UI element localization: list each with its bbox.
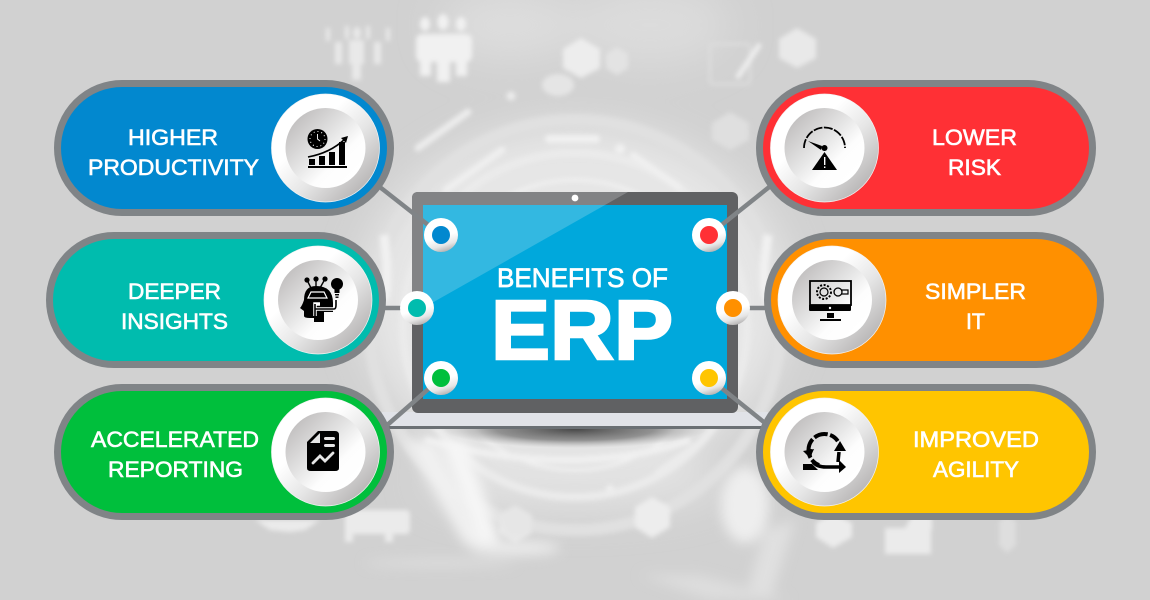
panel: improved agility: [760, 388, 1092, 516]
label: INSIGHTS: [121, 309, 228, 334]
connector lines: [376, 180, 778, 427]
node: red: [692, 218, 726, 252]
webcam: [572, 195, 578, 201]
icon disc: [272, 94, 380, 202]
label: IMPROVED: [913, 427, 1039, 452]
icon: head with circuit and light bulb: [300, 276, 343, 322]
label: PRODUCTIVITY: [88, 155, 259, 180]
node: orange: [716, 291, 750, 325]
label: DEEPER: [128, 279, 221, 304]
panel: higher productivity: [58, 84, 390, 212]
checklist and pencil: [710, 44, 750, 84]
title line two: ERP: [491, 283, 673, 377]
hexagons: [563, 38, 600, 78]
label: IT: [966, 309, 985, 334]
label: [121, 279, 228, 334]
people group left: [326, 26, 390, 80]
node: yellow: [692, 361, 726, 395]
people group right: [416, 14, 472, 82]
bezel highlight: [412, 192, 628, 314]
label: REPORTING: [108, 457, 243, 482]
laptop: [382, 192, 768, 448]
icon disc: [778, 246, 886, 354]
icon disc: [272, 398, 380, 506]
label: HIGHER: [128, 125, 218, 150]
panel: deeper insights: [50, 236, 382, 364]
label: [932, 125, 1017, 180]
laptop shadow: [443, 410, 707, 448]
node: teal: [400, 291, 434, 325]
label: [88, 125, 259, 180]
node: green: [424, 361, 458, 395]
icon disc: [770, 398, 878, 506]
icon disc: [770, 94, 878, 202]
bottom hexagons and shapes: [635, 497, 670, 538]
label: SIMPLER: [925, 279, 1026, 304]
label: AGILITY: [933, 457, 1019, 482]
decorative rings: [370, 112, 780, 530]
label: LOWER: [932, 125, 1017, 150]
icon: agility cycle arrows: [803, 431, 846, 473]
icon: report document: [307, 431, 339, 471]
laptop bezel: [412, 192, 738, 413]
title line one: BENEFITS OF: [497, 263, 668, 293]
base edge: [382, 426, 768, 429]
node: blue: [424, 218, 458, 252]
label: [925, 279, 1026, 334]
laptop screen: [423, 205, 727, 399]
panel: lower risk: [760, 84, 1092, 212]
screen gloss: [423, 205, 605, 308]
label: RISK: [948, 155, 1001, 180]
panel: simpler it: [768, 236, 1100, 364]
label: [913, 427, 1039, 482]
icon disc: [264, 246, 372, 354]
label: ACCELERATED: [91, 427, 259, 452]
label: [91, 427, 259, 482]
panel: accelerated reporting: [58, 388, 390, 516]
laptop base: [382, 412, 768, 426]
icon: clock and rising chart: [308, 129, 348, 168]
icon: monitor with gear and wrench: [809, 281, 851, 321]
icon: risk gauge with warning: [804, 127, 845, 170]
